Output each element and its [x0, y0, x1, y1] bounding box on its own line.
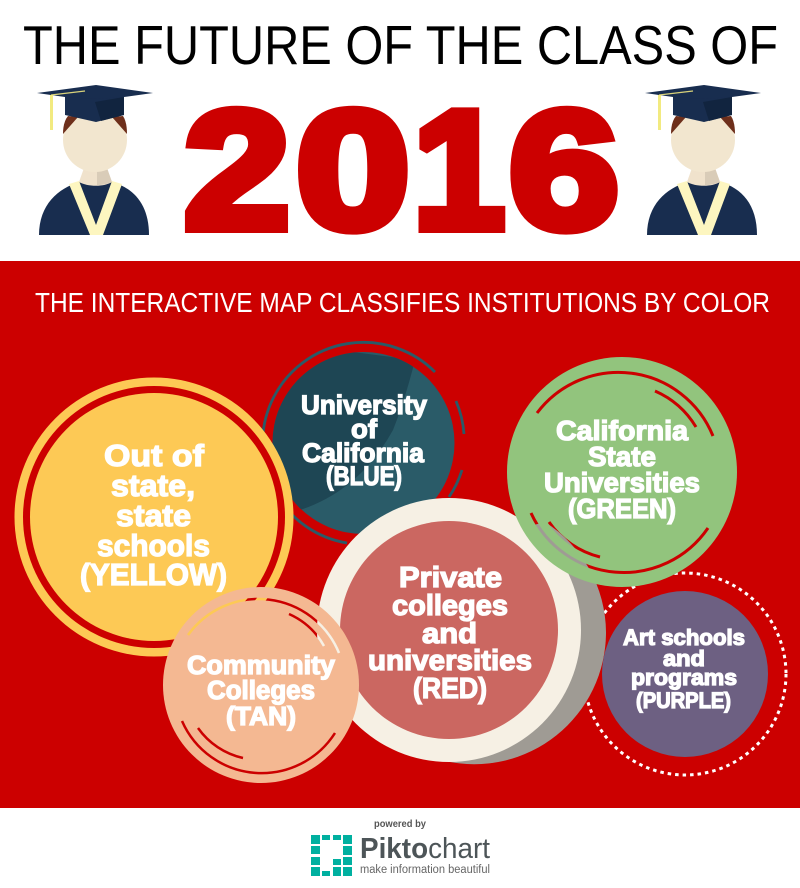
circle: out of state yellow: Out of: [104, 438, 205, 473]
circle: art schools purple: Art schools: [623, 625, 745, 650]
circle: University of California blue: University: [301, 390, 427, 420]
circle: University of California blue: of: [351, 414, 377, 444]
circle: California State green: (GREEN): [568, 493, 676, 524]
circle: art schools purple: programs: [631, 665, 737, 690]
year 2016: [184, 76, 619, 264]
circle: private colleges red: (RED): [413, 673, 487, 705]
ring: dotted purple outline: [584, 573, 786, 775]
circle: art schools purple: (PURPLE): [636, 688, 731, 713]
icon: Piktochart logo: [311, 835, 352, 876]
circle: out of state yellow: state: [116, 498, 191, 533]
circle: California State green: [507, 357, 737, 587]
circle: community colleges tan: (TAN): [226, 703, 296, 731]
circle: community colleges tan: [163, 587, 359, 783]
circle: University of California blue: California: [302, 438, 424, 468]
year 2016: 0: [296, 76, 410, 264]
icon: graduate left: [37, 85, 153, 235]
footer: tagline: make information beautiful: [360, 864, 490, 876]
circle: art schools purple: [602, 591, 768, 757]
circle: California State green: State: [588, 441, 656, 472]
circle: University of California blue: (BLUE): [326, 461, 402, 491]
circle: art schools purple: and: [663, 646, 705, 671]
circle: private colleges red: and: [422, 618, 477, 650]
circle: University of California blue: [260, 340, 464, 543]
circle: private colleges red: Private: [399, 562, 502, 594]
year 2016: 6: [509, 76, 619, 264]
year 2016: 1: [413, 76, 505, 264]
icon: graduate right: [645, 85, 761, 235]
circle: out of state yellow: state,: [111, 468, 195, 503]
circle: community colleges tan: Community: [187, 652, 336, 680]
year 2016: 2: [184, 76, 290, 264]
footer: powered by text: powered by: [374, 819, 426, 830]
circle: private colleges red: [317, 498, 606, 764]
circle: out of state yellow: schools: [97, 528, 210, 563]
footer: Piktochart wordmark: Piktochart: [360, 833, 490, 865]
circle: out of state yellow: [14, 378, 294, 656]
circle: private colleges red: universities: [368, 645, 532, 677]
circle: California State green: California: [556, 415, 689, 446]
circle: private colleges red: colleges: [392, 590, 508, 622]
circle: California State green: Universities: [544, 467, 700, 498]
circle: community colleges tan: Colleges: [207, 677, 315, 705]
panel: institution map key: [0, 261, 800, 808]
circle: out of state yellow: (YELLOW): [80, 557, 227, 592]
